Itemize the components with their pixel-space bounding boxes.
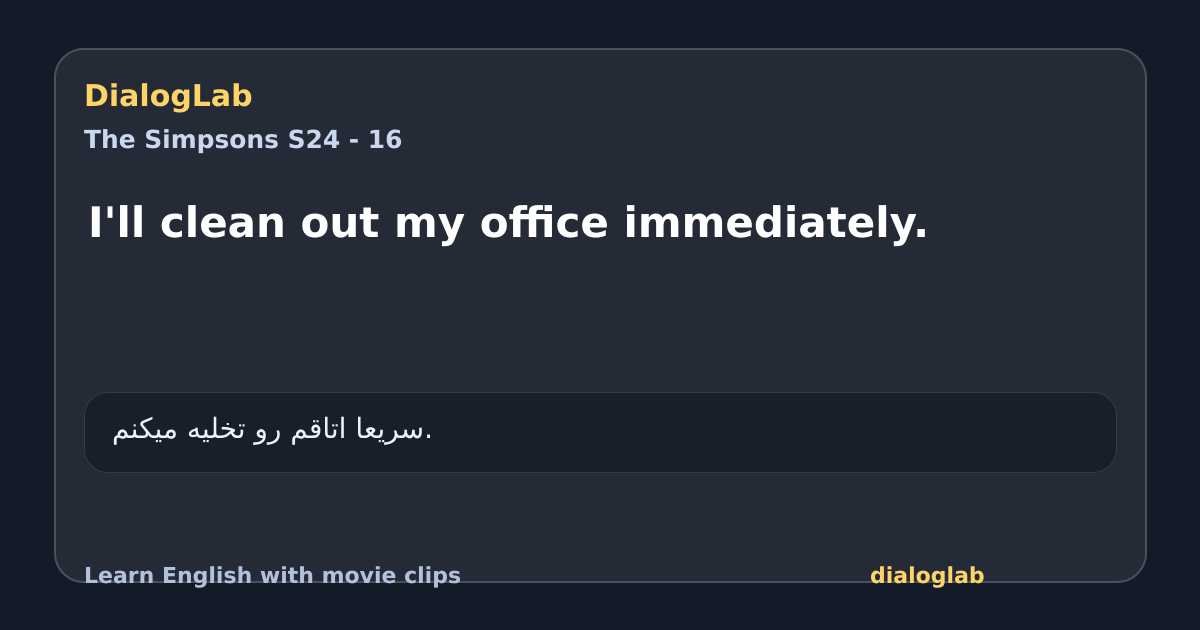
panel: card bbox=[54, 48, 1147, 583]
footer brand: dialoglab bbox=[870, 564, 985, 589]
brand heading: DialogLab bbox=[84, 79, 253, 114]
translation text: سریعا اتاقم رو تخلیه میکنم. bbox=[112, 412, 433, 445]
footer tagline: Learn English with movie clips bbox=[84, 564, 461, 589]
episode subtitle: The Simpsons S24 - 16 bbox=[84, 125, 402, 154]
panel: translation box bbox=[84, 392, 1117, 473]
main quote: I'll clean out my office immediately. bbox=[88, 198, 929, 247]
